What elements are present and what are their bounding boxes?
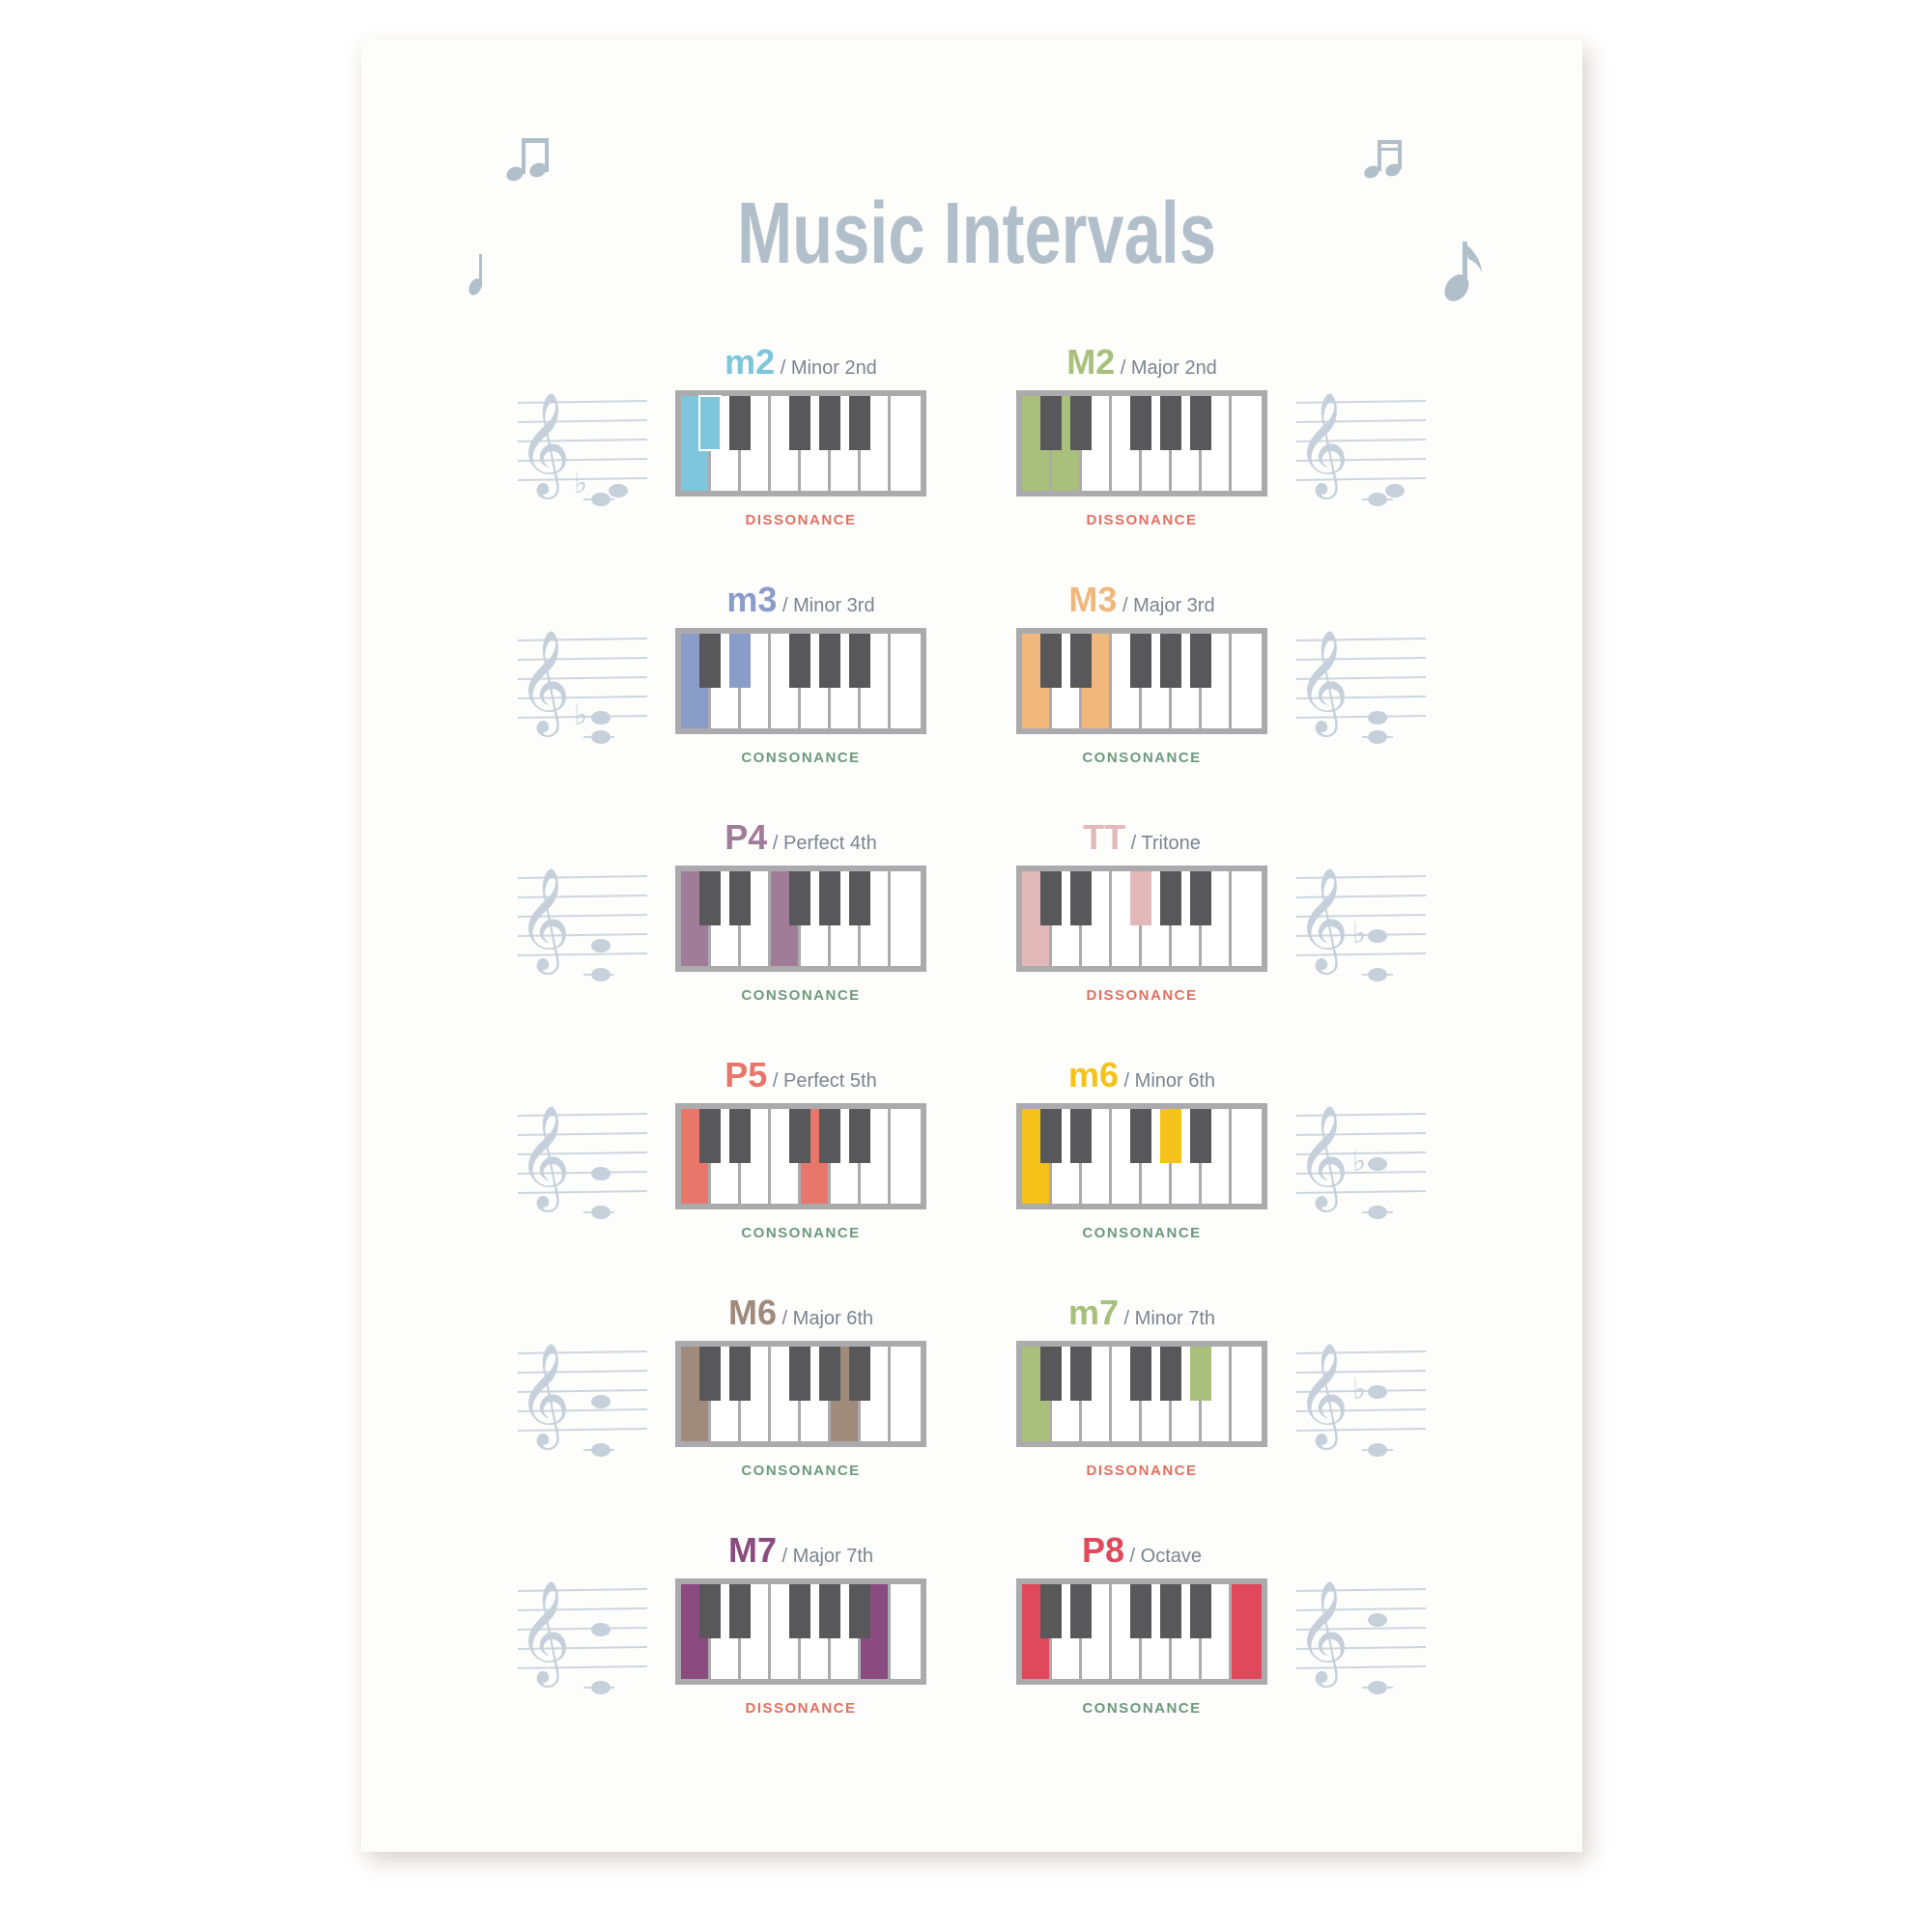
panel: M6: CONSONANCE — [741, 1463, 861, 1479]
staff: m3 — [518, 629, 647, 744]
panel: m6: CONSONANCE — [1082, 1225, 1202, 1241]
staff: M7 — [518, 1579, 647, 1694]
panel: M2 — [1016, 342, 1267, 528]
staff: M2 — [1296, 391, 1426, 506]
staff: m2: ♭ — [574, 467, 587, 500]
panel: m6: m6 / Minor 6th — [1068, 1055, 1215, 1094]
panel: m6 — [1016, 1055, 1267, 1241]
panel: m2: DISSONANCE — [745, 512, 857, 528]
staff: m3: ♭ — [574, 698, 587, 732]
staff: M3 — [1296, 629, 1426, 744]
staff: M2: 𝄞 — [1296, 391, 1349, 499]
panel: P5: P5 / Perfect 5th — [724, 1055, 877, 1094]
panel: M2: M2 / Major 2nd — [1066, 342, 1217, 382]
staff: m6: ♭ — [1352, 1145, 1366, 1179]
title: Music Intervals — [737, 185, 1216, 282]
panel: P5: CONSONANCE — [741, 1225, 861, 1241]
staff: TT — [1296, 867, 1426, 981]
panel: m3: m3 / Minor 3rd — [726, 580, 875, 619]
panel: P8 — [1016, 1530, 1267, 1717]
panel: P4: P4 / Perfect 4th — [724, 817, 877, 857]
panel: m7: DISSONANCE — [1086, 1463, 1198, 1479]
staff: P8: 𝄞 — [1296, 1579, 1349, 1688]
icon: beamed notes top-right — [1362, 140, 1403, 181]
staff: m7 — [1296, 1342, 1426, 1457]
panel: M7: DISSONANCE — [745, 1700, 857, 1717]
staff: m2 — [518, 391, 647, 506]
panel: M6: M6 / Major 6th — [728, 1293, 873, 1332]
panel: P4: CONSONANCE — [741, 987, 861, 1004]
panel: P8: CONSONANCE — [1082, 1700, 1202, 1717]
staff: P5 — [518, 1104, 647, 1219]
staff: m6: 𝄞 — [1296, 1104, 1349, 1212]
panel: M6 — [675, 1293, 926, 1479]
paper shadow — [367, 48, 1588, 1861]
panel: TT: TT / Tritone — [1083, 817, 1201, 857]
icon: eighth note right — [1439, 242, 1482, 306]
staff: M6: 𝄞 — [518, 1342, 570, 1450]
panel: TT — [1016, 817, 1267, 1004]
panel: M3: M3 / Major 3rd — [1068, 580, 1215, 619]
panel: M2: DISSONANCE — [1086, 512, 1198, 528]
staff: m7: ♭ — [1352, 1373, 1366, 1406]
icon: quarter note left — [467, 254, 484, 298]
panel: TT: DISSONANCE — [1086, 987, 1198, 1004]
panel: M3: CONSONANCE — [1082, 750, 1202, 766]
panel: M3 — [1016, 580, 1267, 766]
panel: P4 — [675, 817, 926, 1004]
panel: m2: m2 / Minor 2nd — [724, 342, 877, 382]
staff: P8 — [1296, 1579, 1426, 1694]
panel: m3: CONSONANCE — [741, 750, 861, 766]
icon: beamed notes top-left — [504, 138, 549, 184]
panel: P5 — [675, 1055, 926, 1241]
staff: TT: 𝄞 — [1296, 867, 1349, 975]
staff: m2: 𝄞 — [518, 391, 570, 499]
panel: M7: M7 / Major 7th — [728, 1530, 873, 1570]
panel: m7 — [1016, 1293, 1267, 1479]
panel: M7 — [675, 1530, 926, 1717]
staff: m3: 𝄞 — [518, 629, 570, 737]
staff: M3: 𝄞 — [1296, 629, 1349, 737]
panel: m2 — [675, 342, 926, 528]
staff: P5: 𝄞 — [518, 1104, 570, 1212]
staff: P4 — [518, 867, 647, 981]
staff: P4: 𝄞 — [518, 867, 570, 975]
panel: P8: P8 / Octave — [1082, 1530, 1202, 1570]
staff: M7: 𝄞 — [518, 1579, 570, 1688]
staff: M6 — [518, 1342, 647, 1457]
staff: TT: ♭ — [1352, 917, 1366, 951]
staff: m7: 𝄞 — [1296, 1342, 1349, 1450]
panel: m7: m7 / Minor 7th — [1068, 1293, 1215, 1332]
panel: m3 — [675, 580, 926, 766]
staff: m6 — [1296, 1104, 1426, 1219]
paper — [361, 40, 1582, 1852]
